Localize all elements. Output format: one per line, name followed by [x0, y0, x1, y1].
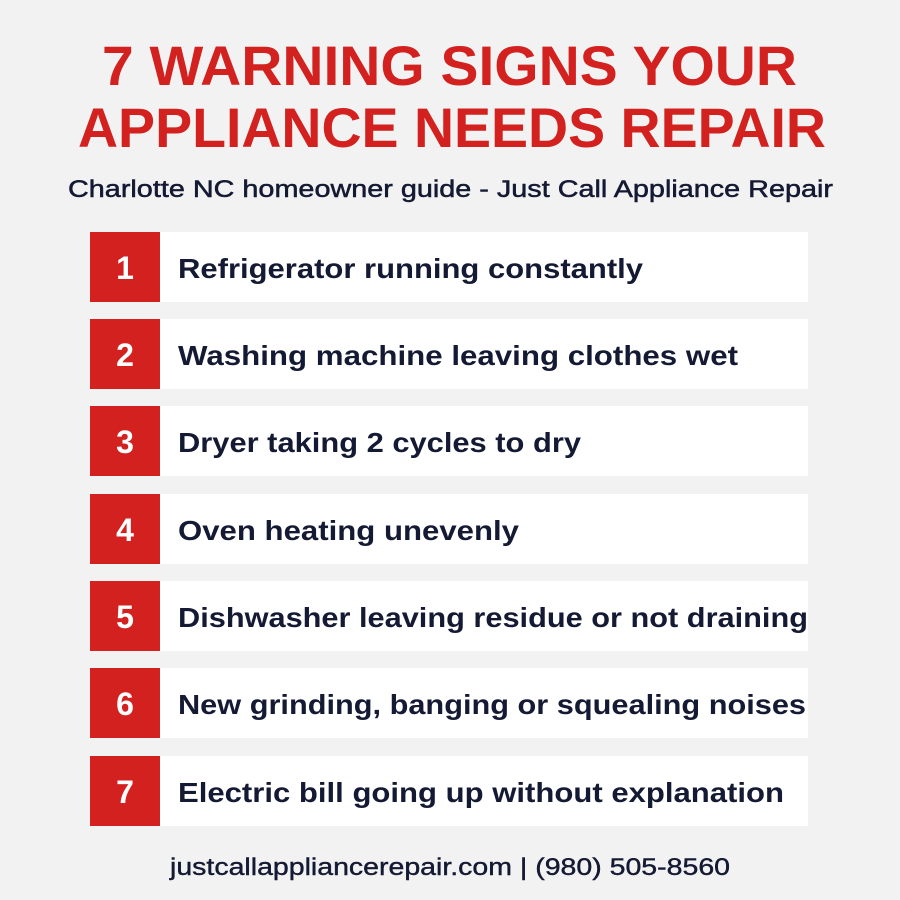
row 2: [90, 319, 808, 389]
row 5: 5: [116, 599, 134, 635]
row 7: 7: [116, 774, 134, 810]
row 4: Oven heating unevenly: [178, 515, 519, 546]
row 6: New grinding, banging or squealing noises: [178, 689, 806, 720]
row 5: Dishwasher leaving residue or not draining: [178, 602, 808, 633]
row 3: 3: [116, 424, 134, 460]
row 3: [90, 406, 808, 476]
row 2: Washing machine leaving clothes wet: [178, 340, 738, 371]
title: 7 WARNING SIGNS YOUR: [102, 34, 797, 97]
row 2: 2: [116, 337, 134, 373]
row 7: Electric bill going up without explanation: [178, 777, 784, 808]
footer: justcallappliancerepair.com | (980) 505-8560: [169, 854, 730, 881]
row 6: 6: [116, 686, 134, 722]
row 1: Refrigerator running constantly: [178, 253, 643, 284]
row 1: [90, 232, 808, 302]
row 4: [90, 494, 808, 564]
row 3: Dryer taking 2 cycles to dry: [178, 427, 581, 458]
row 6: [90, 668, 808, 738]
row 5: [90, 581, 808, 651]
title: [78, 34, 826, 159]
title: APPLIANCE NEEDS REPAIR: [78, 96, 826, 159]
row 4: 4: [116, 512, 134, 548]
row 1: 1: [116, 250, 134, 286]
subtitle: Charlotte NC homeowner guide - Just Call Appliance Repair: [68, 176, 833, 203]
row 7: [90, 756, 808, 826]
